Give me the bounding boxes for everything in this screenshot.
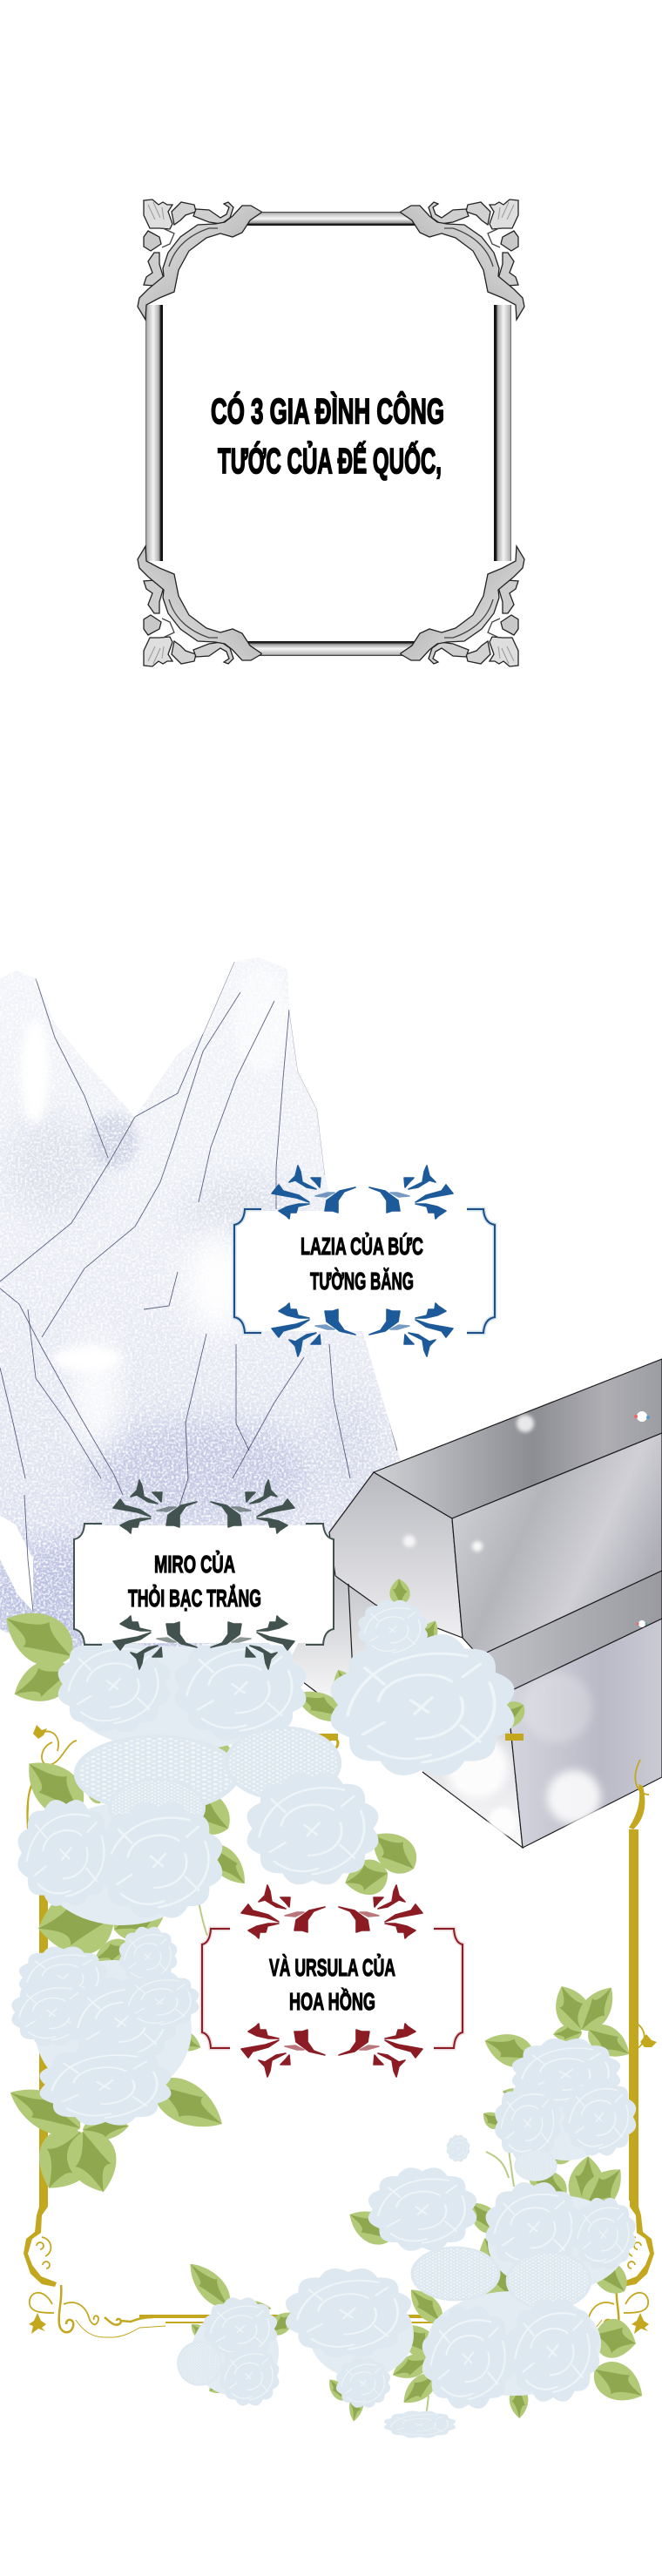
- Lazia text: TƯỜNG BĂNG: [310, 1268, 414, 1295]
- ice outline strokes: [0, 962, 397, 1612]
- ornament: Ursula flourishes: [241, 1885, 422, 2077]
- callout: Miro: [74, 1480, 334, 1669]
- Lazia text: [301, 1232, 423, 1295]
- gold corner bands: [24, 1725, 657, 2334]
- illustration: silver ingots: [285, 1359, 662, 1848]
- Lazia text: LAZIA CỦA BỨC: [301, 1232, 423, 1260]
- title text: CÓ 3 GIA ĐÌNH CÔNG: [211, 391, 444, 431]
- Miro text: [128, 1550, 261, 1612]
- callout: Ursula: [200, 1885, 464, 2077]
- title text: [211, 391, 444, 481]
- ornament: Lazia flourishes: [272, 1166, 453, 1356]
- callout: Lazia: [234, 1166, 496, 1356]
- gold scrolls: [30, 1731, 649, 2337]
- Miro text: MIRO CỦA: [154, 1550, 235, 1578]
- title text: TƯỚC CỦA ĐẾ QUỐC,: [218, 441, 442, 481]
- panel: ornate silver frame with title: [138, 199, 524, 666]
- Ursula text: HOA HỒNG: [289, 1988, 375, 2015]
- illustration: leaves: [0, 1578, 651, 2431]
- bokeh and sparkles: [403, 1411, 650, 1836]
- illustration: icy mountains: [0, 954, 409, 1660]
- Ursula text: [269, 1953, 395, 2015]
- frame bars: [145, 212, 511, 656]
- illustration: gold frame: [24, 1725, 657, 2337]
- ornament: Miro flourishes: [113, 1480, 294, 1669]
- illustration: pale roses: [11, 1600, 636, 2438]
- frame corners: [138, 199, 524, 666]
- Miro text: THỎI BẠC TRẮNG: [128, 1584, 261, 1612]
- rose mass backdrop: [35, 1646, 627, 2396]
- Ursula text: VÀ URSULA CỦA: [269, 1953, 395, 1981]
